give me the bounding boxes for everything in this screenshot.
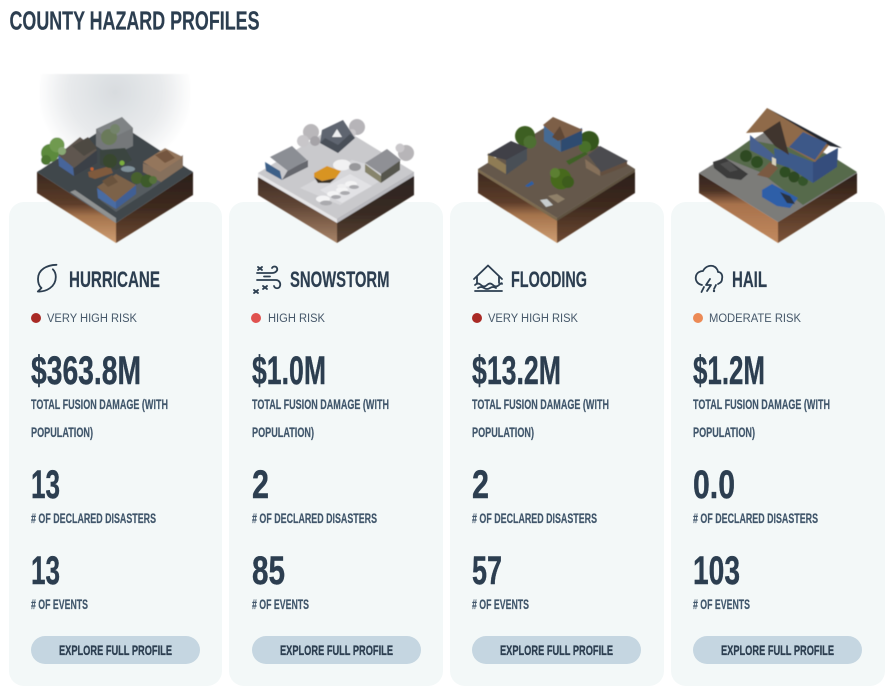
trees	[303, 124, 319, 140]
heading: hurricane: HURRICANE	[69, 267, 160, 292]
metric: damage: POPULATION)	[31, 425, 93, 440]
solar panels	[789, 132, 827, 160]
dark car	[713, 158, 748, 180]
cars	[525, 181, 534, 187]
trees back	[515, 126, 535, 146]
metric: damage: $363.8M	[31, 349, 141, 393]
lawn	[725, 140, 857, 205]
metric: damage	[693, 349, 830, 440]
icon: snowstorm wind	[254, 266, 280, 293]
title: COUNTY HAZARD PROFILES	[10, 8, 260, 36]
metric: declared disasters: 13	[31, 463, 60, 507]
risk indicator: HIGH RISK	[268, 311, 326, 325]
snowed cars	[316, 196, 330, 202]
metric: events: # OF EVENTS	[252, 597, 309, 612]
button: EXPLORE FULL PROFILE	[280, 642, 393, 658]
button: EXPLORE FULL PROFILE	[721, 642, 834, 658]
left house	[488, 153, 506, 174]
roof	[746, 108, 830, 162]
front tree	[550, 168, 572, 190]
metric: declared disasters: # OF DECLARED DISASTERS	[252, 511, 377, 526]
icon: hail cloud	[696, 266, 722, 292]
metric: declared disasters: # OF DECLARED DISASTERS	[693, 511, 818, 526]
house walls	[750, 135, 775, 163]
risk indicator: VERY HIGH RISK	[47, 311, 138, 325]
metric: damage	[252, 349, 389, 440]
image: snowstorm diorama	[258, 119, 414, 243]
left house	[265, 162, 282, 180]
metric: declared disasters	[31, 463, 156, 526]
icon: flood house	[474, 266, 502, 291]
metric: events: 85	[252, 549, 285, 593]
back house	[96, 117, 133, 156]
risk indicator: MODERATE RISK	[709, 311, 802, 325]
hedge	[566, 152, 588, 165]
metric: events: # OF EVENTS	[31, 597, 88, 612]
metric: damage	[31, 349, 168, 440]
back house	[544, 125, 561, 152]
panel: hail	[671, 108, 885, 686]
plow	[314, 166, 341, 181]
metric: events	[472, 549, 529, 612]
metric: declared disasters: # OF DECLARED DISASTERS	[472, 511, 597, 526]
button: EXPLORE FULL PROFILE	[500, 642, 613, 658]
button	[31, 636, 200, 664]
heading: hail: HAIL	[732, 267, 767, 292]
bushes	[131, 172, 143, 184]
metric: damage	[472, 349, 609, 440]
metric: declared disasters	[472, 463, 597, 526]
metric: damage: $13.2M	[472, 349, 561, 393]
metric: damage: TOTAL FUSION DAMAGE (WITH	[472, 397, 609, 412]
icon: hurricane	[38, 265, 56, 292]
panel: flooding	[450, 117, 664, 686]
left tree	[41, 144, 59, 162]
metric: damage: POPULATION)	[252, 425, 314, 440]
left blue house	[58, 155, 74, 176]
heading: snowstorm: SNOWSTORM	[290, 267, 390, 292]
image: hail diorama	[699, 108, 857, 243]
metric: events	[31, 549, 88, 612]
heading: flooding: FLOODING	[511, 267, 587, 292]
metric: events: 57	[472, 549, 502, 593]
right house	[585, 159, 600, 176]
blue car	[762, 184, 798, 208]
risk indicator: VERY HIGH RISK	[488, 311, 579, 325]
metric: events: 13	[31, 549, 60, 593]
steps	[757, 162, 778, 178]
panel: hurricane	[9, 74, 222, 686]
button: EXPLORE FULL PROFILE	[59, 642, 172, 658]
metric: declared disasters: # OF DECLARED DISASTERS	[31, 511, 156, 526]
button	[252, 636, 421, 664]
front blue house	[97, 188, 116, 209]
metric: damage: $1.2M	[693, 349, 765, 393]
image: hurricane diorama	[37, 74, 193, 243]
metric: damage: TOTAL FUSION DAMAGE (WITH	[252, 397, 389, 412]
metric: declared disasters: 0.0	[693, 463, 735, 507]
image: flooding diorama	[478, 117, 635, 243]
metric: declared disasters: 2	[252, 463, 269, 507]
metric: events	[693, 549, 750, 612]
metric: events: # OF EVENTS	[472, 597, 529, 612]
door	[772, 157, 776, 166]
metric: damage: POPULATION)	[693, 425, 755, 440]
back house	[320, 120, 355, 153]
button	[472, 636, 641, 664]
metric: damage: $1.0M	[252, 349, 326, 393]
button	[693, 636, 862, 664]
metric: events	[252, 549, 309, 612]
metric: damage: POPULATION)	[472, 425, 534, 440]
panel: snowstorm	[229, 119, 443, 686]
bushes	[740, 150, 752, 162]
metric: events: # OF EVENTS	[693, 597, 750, 612]
metric: damage: TOTAL FUSION DAMAGE (WITH	[31, 397, 168, 412]
snow road	[300, 160, 395, 205]
metric: declared disasters	[693, 463, 818, 526]
metric: declared disasters: 2	[472, 463, 489, 507]
debris	[88, 166, 113, 179]
metric: declared disasters	[252, 463, 377, 526]
right house	[143, 166, 162, 182]
right house	[365, 164, 381, 183]
metric: events: 103	[693, 549, 740, 593]
